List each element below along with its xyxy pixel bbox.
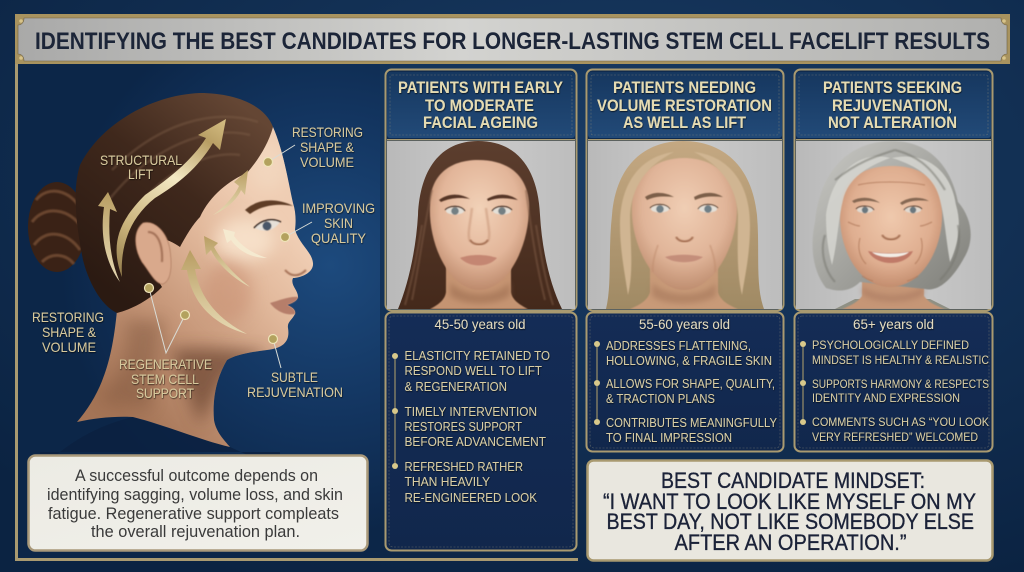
details panel: 45-50 years: BEFORE ADVANCEMENT: [404, 434, 546, 449]
nose and lips: [285, 270, 306, 275]
heading: PATIENTS NEEDING: [613, 79, 756, 97]
label: restoring shape and volume, upper: VOLUME: [300, 154, 354, 170]
panel: left profile area: [15, 60, 578, 561]
details panel: 55-60 years: 55-60 years old: [639, 317, 730, 332]
arrow: large structural lift: [117, 119, 226, 277]
panel: rejuvenation not alteration: [794, 70, 992, 310]
heading: [588, 72, 782, 138]
callout: successful outcome: the overall rejuvenation plan.: [91, 523, 300, 541]
details panel: 55-60 years: ALLOWS FOR SHAPE, QUALITY,: [606, 376, 775, 391]
details panel: 45-50 years: TIMELY INTERVENTION: [404, 404, 537, 419]
face shading: [100, 139, 288, 425]
details panel: 45-50 years: [386, 312, 576, 550]
heading: PATIENTS WITH EARLY: [398, 79, 563, 97]
details panel: 45-50 years: RESPOND WELL TO LIFT: [404, 363, 542, 378]
details panel: 55-60 years: [586, 312, 784, 452]
hair: [76, 93, 273, 313]
label: subtle rejuvenation: REJUVENATION: [247, 384, 343, 400]
heading: AS WELL AS LIFT: [623, 114, 746, 132]
portrait: woman 65+: [796, 141, 991, 309]
quote: best candidate mindset: BEST DAY, NOT LIKE SOMEBODY ELSE: [606, 509, 974, 534]
callout: successful outcome: identifying sagging, volume loss, and skin: [47, 486, 343, 504]
details panel: 55-60 years: ADDRESSES FLATTENING,: [606, 338, 751, 353]
label: restoring shape and volume, lower: SHAPE &: [42, 324, 97, 340]
label: structural lift: [100, 152, 182, 182]
portrait: woman 45-50: [387, 141, 575, 309]
panel: early to moderate ageing: [386, 70, 576, 310]
eye and brow: [245, 200, 293, 231]
details panel: 45-50 years: & REGENERATION: [404, 379, 507, 394]
label: restoring shape and volume, lower: [32, 309, 104, 355]
details panel: 65+ years: SUPPORTS HARMONY & RESPECTS: [812, 377, 989, 391]
heading: REJUVENATION,: [832, 97, 952, 115]
heading: TO MODERATE: [425, 97, 534, 115]
label: subtle rejuvenation: SUBTLE: [271, 369, 318, 385]
skin: [77, 125, 313, 447]
details panel: 65+ years: COMMENTS SUCH AS “YOU LOOK: [812, 415, 989, 429]
details panel: 65+ years: VERY REFRESHED” WELCOMED: [812, 430, 978, 444]
arrow: forehead: [213, 170, 248, 215]
label: improving skin quality: [302, 200, 375, 246]
quote: best candidate mindset: “I WANT TO LOOK LIKE MYSELF ON MY: [603, 489, 976, 514]
label: improving skin quality: QUALITY: [311, 230, 367, 246]
callout: successful outcome: [28, 456, 368, 550]
label: restoring shape and volume, lower: VOLUME: [42, 339, 96, 355]
label: subtle rejuvenation: [247, 369, 343, 400]
quote: best candidate mindset: [588, 460, 992, 560]
profile head illustration: [28, 93, 313, 470]
details panel: 45-50 years: RE-ENGINEERED LOOK: [404, 490, 537, 505]
title banner: [15, 14, 1010, 64]
details panel: 65+ years: PSYCHOLOGICALLY DEFINED: [812, 338, 969, 352]
details panel: 65+ years: 65+ years old: [853, 317, 934, 332]
label: regenerative stem cell support: STEM CELL: [131, 371, 199, 387]
ear: [136, 223, 171, 284]
label: improving skin quality: IMPROVING: [302, 200, 375, 216]
details panel: 65+ years: [794, 312, 992, 452]
arrow: upper cheek: [223, 229, 267, 258]
details panel: 65+ years: IDENTITY AND EXPRESSION: [812, 391, 960, 405]
details panel: 45-50 years: 45-50 years old: [434, 317, 526, 332]
label: regenerative stem cell support: REGENERATIVE: [119, 356, 212, 372]
details panel: 65+ years: MINDSET IS HEALTHY & REALISTIC: [812, 353, 989, 367]
heading: PATIENTS SEEKING: [823, 79, 962, 97]
label: restoring shape and volume, upper: [292, 124, 363, 170]
heading: [796, 72, 991, 138]
quote: best candidate mindset: AFTER AN OPERATION.”: [674, 530, 906, 555]
callout markers: [144, 145, 312, 368]
label: improving skin quality: SKIN: [324, 215, 353, 231]
clothing: [40, 417, 280, 470]
bun: [28, 182, 86, 272]
details panel: 45-50 years: ELASTICITY RETAINED TO: [404, 348, 550, 363]
arrow: rear lift: [98, 192, 120, 282]
quote: best candidate mindset: BEST CANDIDATE MINDSET:: [661, 468, 925, 493]
heading: NOT ALTERATION: [828, 114, 957, 132]
callout: successful outcome: fatigue. Regenerative support compleats: [48, 505, 339, 523]
details panel: 45-50 years: THAN HEAVILY: [404, 474, 490, 489]
details panel: 45-50 years: RESTORES SUPPORT: [404, 419, 522, 434]
label: restoring shape and volume, upper: SHAPE &: [300, 139, 355, 155]
heading: VOLUME RESTORATION: [597, 97, 772, 115]
heading: FACIAL AGEING: [423, 114, 538, 132]
callout: successful outcome: A successful outcome depends on: [75, 467, 318, 485]
label: structural lift: STRUCTURAL: [100, 152, 182, 168]
portrait: woman 55-60: [588, 141, 782, 309]
heading: [387, 72, 575, 138]
label: structural lift: LIFT: [128, 166, 153, 182]
arrow: jaw: [181, 250, 247, 334]
label: regenerative stem cell support: [119, 356, 212, 401]
label: regenerative stem cell support: SUPPORT: [136, 385, 194, 401]
details panel: 55-60 years: TO FINAL IMPRESSION: [606, 430, 732, 445]
details panel: 55-60 years: CONTRIBUTES MEANINGFULLY: [606, 415, 777, 430]
label: restoring shape and volume, upper: RESTORING: [292, 124, 363, 140]
label: restoring shape and volume, lower: RESTORING: [32, 309, 104, 325]
details panel: 55-60 years: & TRACTION PLANS: [606, 391, 715, 406]
details panel: 45-50 years: REFRESHED RATHER: [404, 459, 523, 474]
panel: volume restoration: [586, 70, 784, 310]
details panel: 55-60 years: HOLLOWING, & FRAGILE SKIN: [606, 353, 772, 368]
arrow: mid cheek: [204, 236, 250, 287]
